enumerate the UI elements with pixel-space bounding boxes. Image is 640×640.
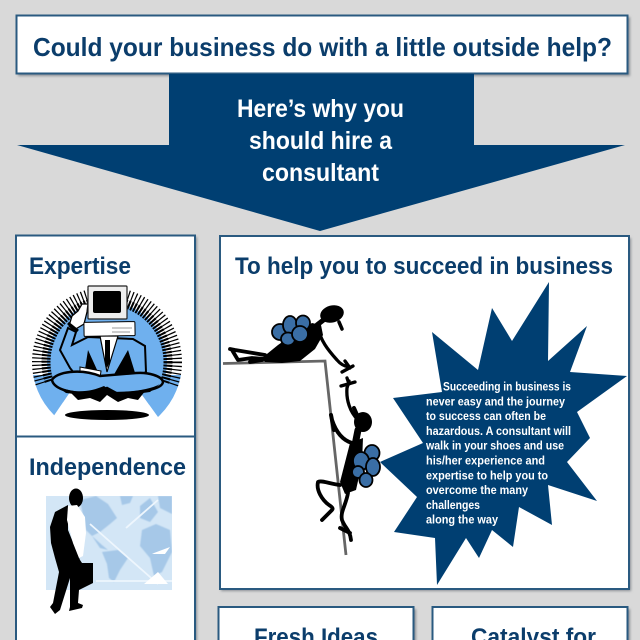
icon: businessman silhouette with world map (46, 488, 172, 614)
panel: expertise and independence (16, 236, 197, 640)
starburst callout: hazardous. A consultant will (426, 426, 571, 438)
illustration: cliff with two climbers (223, 303, 380, 555)
title box (16, 16, 630, 76)
arrow banner: consultant (262, 159, 380, 187)
starburst callout: to success can often be (426, 411, 546, 423)
starburst callout: overcome the many (426, 485, 529, 497)
starburst callout: walk in your shoes and use (425, 441, 564, 453)
title box: Could your business do with a little outside help? (33, 32, 612, 62)
panel: catalyst for (432, 607, 630, 640)
arrow banner: Here’s why you (237, 95, 404, 123)
arrow banner: should hire a (249, 127, 393, 155)
heading: independence: Independence (29, 454, 186, 481)
arrow banner (17, 74, 625, 231)
panel: fresh ideas (218, 607, 416, 640)
shadow under figure (65, 410, 149, 420)
starburst callout: challenges (426, 500, 480, 512)
starburst callout: expertise to help you to (426, 470, 548, 482)
heading: expertise: Expertise (29, 253, 131, 280)
starburst callout: his/her experience and (426, 456, 545, 468)
starburst callout (380, 282, 627, 585)
starburst callout: never easy and the journey (426, 396, 566, 408)
heading: to help you succeed: To help you to succeed in business (235, 253, 613, 280)
starburst callout: along the way (426, 515, 499, 527)
panel: to help you to succeed in business (220, 236, 631, 591)
starburst callout: Succeeding in business is (443, 382, 571, 394)
icon: meditating computer-headed consultant (32, 285, 182, 420)
